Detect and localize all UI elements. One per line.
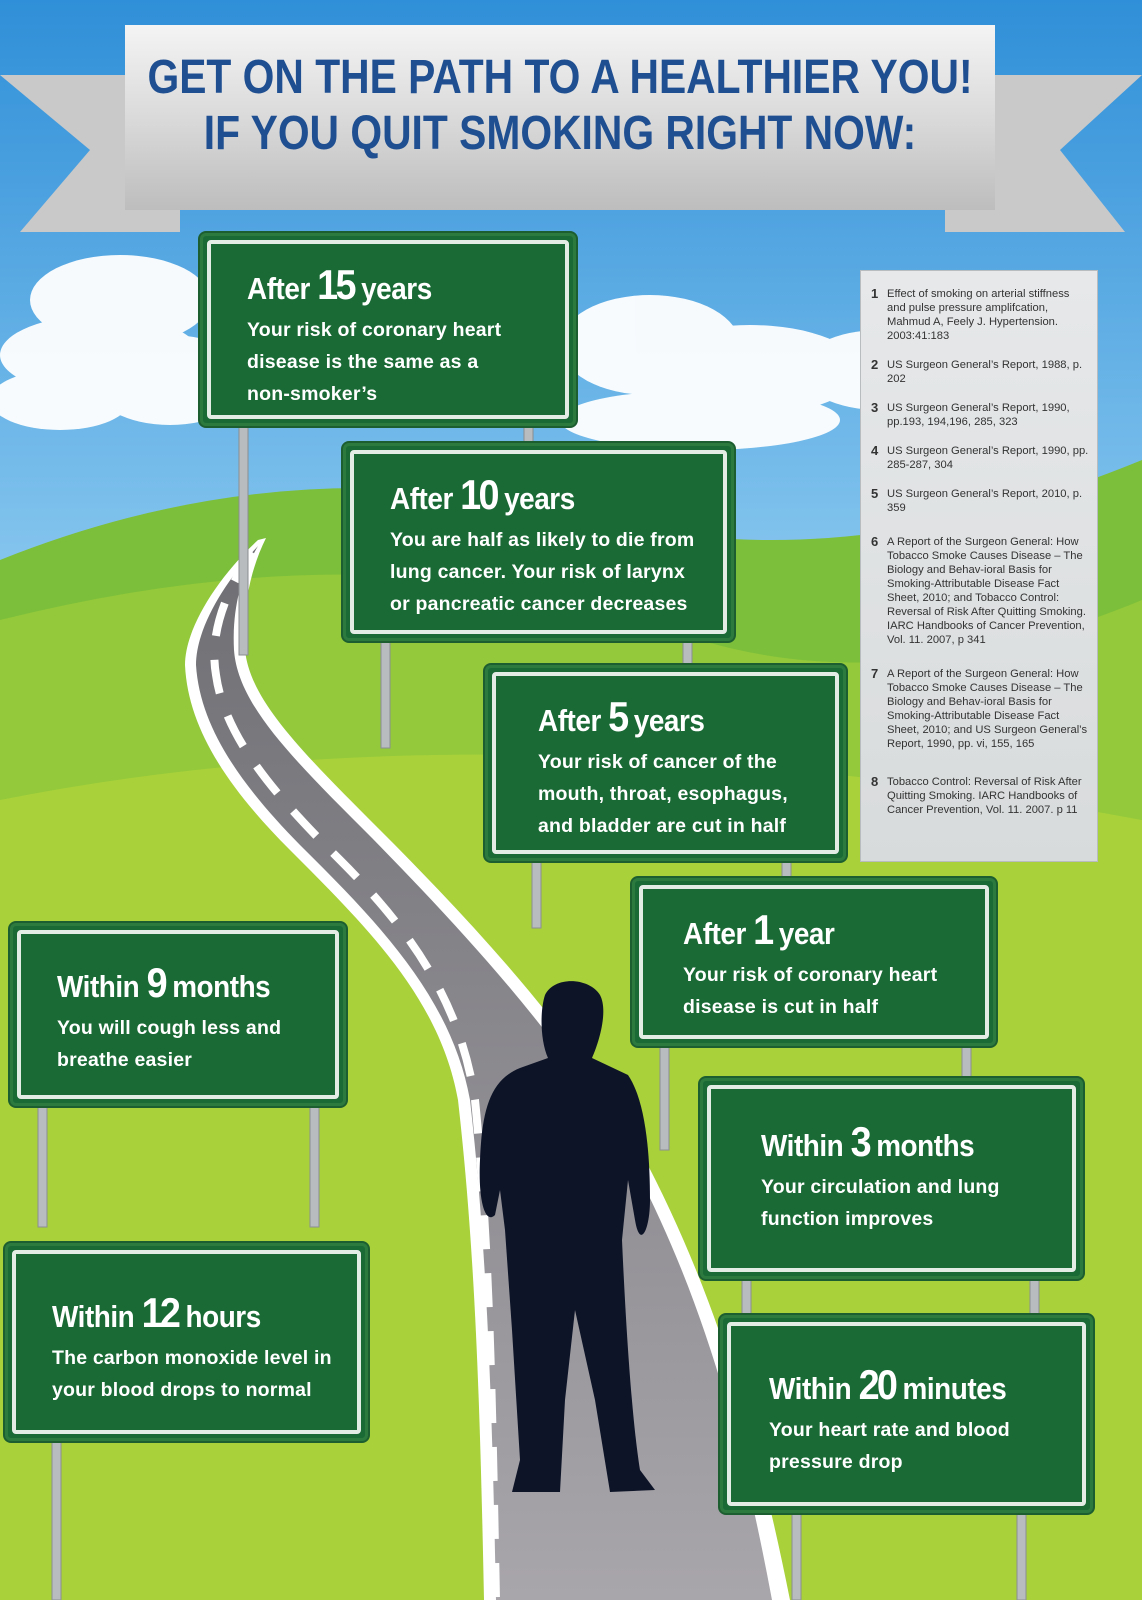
references panel: 8 bbox=[871, 774, 878, 789]
title: GET ON THE PATH TO A HEALTHIER YOU! bbox=[147, 51, 973, 104]
sign: after 10 years: You are half as likely to die from bbox=[390, 529, 694, 551]
sign: after 5 years: and bladder are cut in half bbox=[538, 815, 786, 837]
sign: after 15 years: After 15 years bbox=[247, 261, 432, 308]
references panel: 4 bbox=[871, 443, 878, 458]
sign: after 10 years bbox=[343, 443, 734, 641]
sign: within 9 months: breathe easier bbox=[57, 1049, 192, 1071]
references panel bbox=[860, 270, 1098, 862]
sign: within 9 months: You will cough less and bbox=[57, 1017, 281, 1039]
references panel: 3 bbox=[871, 400, 878, 415]
sign: within 20 minutes: pressure drop bbox=[769, 1451, 903, 1473]
sign: after 5 years: After 5 years bbox=[538, 693, 704, 740]
sign: after 1 year: After 1 year bbox=[683, 906, 834, 953]
sign: within 12 hours: your blood drops to normal bbox=[52, 1379, 312, 1401]
references panel: 7 bbox=[871, 666, 878, 681]
sign: within 9 months bbox=[10, 923, 346, 1106]
sign: within 20 minutes: Your heart rate and blood bbox=[769, 1419, 1010, 1441]
sign: within 9 months: Within 9 months bbox=[57, 959, 270, 1006]
banner bbox=[0, 75, 180, 232]
references panel: Tobacco Control: Reversal of Risk After Quitting Smoking. IARC Handbooks of Cancer Prevention, Vol. 11. 2007. p 11 bbox=[887, 776, 1082, 816]
sign: within 12 hours: Within 12 hours bbox=[52, 1289, 261, 1336]
references panel: 1 bbox=[871, 286, 878, 301]
references panel: Effect of smoking on arterial stiffness and pulse pressure amplifcation, Mahmud A, Feely J. Hypertension. 2003:41:183 bbox=[887, 288, 1069, 342]
references panel: 2 bbox=[871, 357, 878, 372]
posts bbox=[38, 425, 1039, 1600]
references panel: A Report of the Surgeon General: How Tobacco Smoke Causes Disease – The Biology and Behav-ioral Basis for Smoking-Attributable Disease Fact Sheet, 2010; and Tobacco Control: Reversal of Risk After Quitting Smoking. IARC Handbooks of Cancer Prevention, Vol. 11. 2007, p 341 bbox=[887, 536, 1086, 646]
sign: within 3 months: Your circulation and lung bbox=[761, 1176, 1000, 1198]
references panel: 5 bbox=[871, 486, 878, 501]
references panel: US Surgeon General’s Report, 2010, p. 359 bbox=[887, 488, 1082, 514]
sign: after 1 year bbox=[632, 878, 996, 1046]
sign: after 1 year: Your risk of coronary heart bbox=[683, 964, 937, 986]
road bbox=[185, 538, 790, 1600]
references panel: 6 bbox=[871, 534, 878, 549]
sign: after 10 years: lung cancer. Your risk of larynx bbox=[390, 561, 685, 583]
title: IF YOU QUIT SMOKING RIGHT NOW: bbox=[204, 107, 916, 160]
sign: after 15 years: disease is the same as a bbox=[247, 351, 478, 373]
sign: after 15 years: non-smoker’s bbox=[247, 383, 377, 405]
sign: within 20 minutes bbox=[720, 1315, 1093, 1513]
sign: within 3 months: Within 3 months bbox=[761, 1118, 974, 1165]
references panel: US Surgeon General’s Report, 1990, pp.193, 194,196, 285, 323 bbox=[887, 402, 1070, 428]
sign: after 1 year: disease is cut in half bbox=[683, 996, 878, 1018]
sign: within 3 months bbox=[700, 1078, 1083, 1279]
references panel: US Surgeon General’s Report, 1988, p. 202 bbox=[887, 359, 1082, 385]
title bbox=[147, 51, 973, 160]
sign: after 10 years: After 10 years bbox=[390, 471, 575, 518]
sign: within 20 minutes: Within 20 minutes bbox=[769, 1361, 1006, 1408]
person bbox=[480, 981, 655, 1492]
sign: after 15 years bbox=[200, 233, 576, 426]
references panel: US Surgeon General’s Report, 1990, pp. 285-287, 304 bbox=[887, 445, 1088, 471]
sign: within 3 months: function improves bbox=[761, 1208, 933, 1230]
references panel: A Report of the Surgeon General: How Tobacco Smoke Causes Disease – The Biology and Behav-ioral Basis for Smoking-Attributable Disease Fact Sheet, 2010; and US Surgeon General’s Report, 1990, pp. vi, 155, 165 bbox=[887, 668, 1087, 750]
sign: after 5 years bbox=[485, 665, 846, 861]
sign: after 5 years: mouth, throat, esophagus, bbox=[538, 783, 788, 805]
sign: within 12 hours: The carbon monoxide level in bbox=[52, 1347, 332, 1369]
sign: after 10 years: or pancreatic cancer decreases bbox=[390, 593, 688, 615]
sign: after 5 years: Your risk of cancer of the bbox=[538, 751, 777, 773]
sign: after 15 years: Your risk of coronary heart bbox=[247, 319, 501, 341]
sign: within 12 hours bbox=[5, 1243, 368, 1441]
